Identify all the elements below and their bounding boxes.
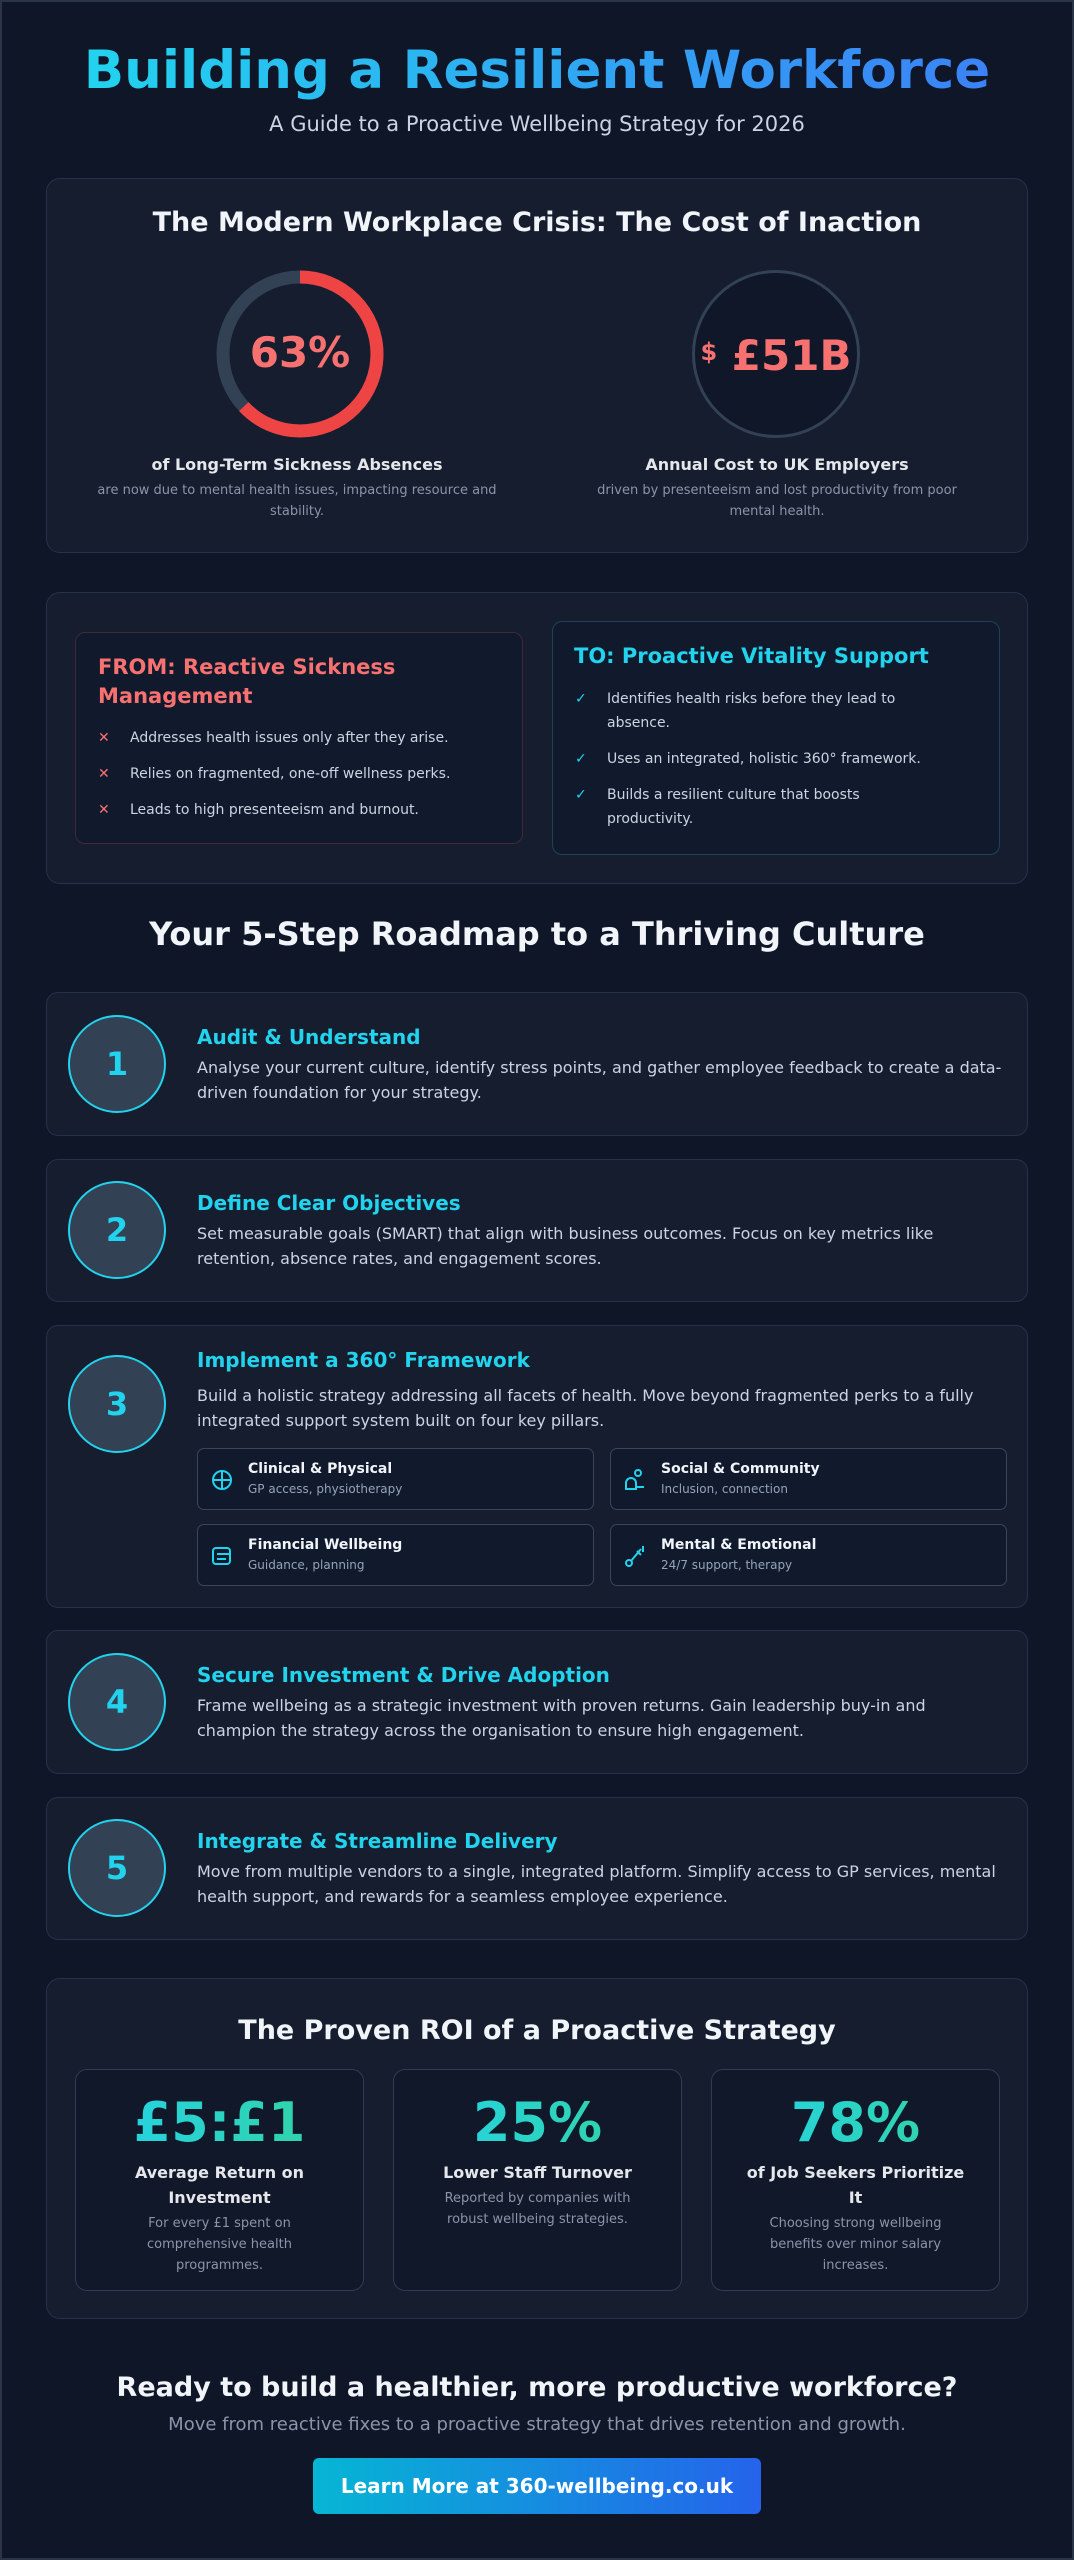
from box: FROM: Reactive Sickness Management — [98, 655, 395, 708]
step 3: 3 — [106, 1385, 128, 1423]
pillar: social — [610, 1448, 1007, 1510]
to box: ✓ — [575, 787, 587, 803]
step 1: Audit & Understand — [197, 1025, 421, 1049]
roadmap heading: Your 5-Step Roadmap to a Thriving Culture — [149, 915, 925, 953]
pillar: financial: Guidance, planning — [248, 1558, 364, 1572]
step 5 — [46, 1797, 1028, 1940]
panel: ROI — [46, 1978, 1028, 2319]
stat label: absences: of Long-Term Sickness Absences — [151, 455, 443, 474]
cost circle: £51B: $ £51B — [700, 331, 852, 380]
CTA button — [313, 2458, 761, 2514]
title: Building a Resilient Workforce — [84, 40, 990, 101]
ROI heading: The Proven ROI of a Proactive Strategy — [238, 2015, 836, 2046]
to box: Builds a resilient culture that boosts productivity. — [607, 787, 860, 827]
CTA subtext: Move from reactive fixes to a proactive strategy that drives retention and growth. — [168, 2414, 906, 2435]
ROI card: 78%: Choosing strong wellbeing benefits over minor salary increases. — [770, 2216, 941, 2273]
CTA button: Learn More at 360-wellbeing.co.uk — [341, 2474, 733, 2498]
step 5: Move from multiple vendors to a single, integrated platform. Simplify access to GP services, mental health support, and rewards for a seamless employee experience. — [197, 1862, 996, 1906]
pillar: social: Inclusion, connection — [661, 1482, 788, 1496]
ROI card: 78%: of Job Seekers Prioritize It — [747, 2163, 964, 2207]
ROI card: 25%: 25% — [473, 2091, 602, 2154]
step 1: 1 — [106, 1045, 128, 1083]
pillar: financial — [197, 1524, 594, 1586]
to box: Identifies health risks before they lead to absence. — [607, 691, 895, 731]
stat label: absences: are now due to mental health issues, impacting resource and stability. — [97, 483, 497, 519]
CTA heading: Ready to build a healthier, more productive workforce? — [117, 2372, 957, 2403]
subtitle: A Guide to a Proactive Wellbeing Strategy for 2026 — [269, 112, 805, 136]
from box — [75, 632, 523, 844]
from box: Relies on fragmented, one-off wellness perks. — [130, 766, 450, 782]
ROI card: 25%: Reported by companies with robust wellbeing strategies. — [445, 2191, 630, 2227]
from box: Leads to high presenteeism and burnout. — [130, 802, 419, 818]
cost circle: £51B — [692, 270, 860, 438]
pillar: mental: Mental & Emotional — [661, 1537, 816, 1553]
step 3: Build a holistic strategy addressing all facets of health. Move beyond fragmented perks to a fully integrated support system built on four key pillars. — [197, 1386, 973, 1430]
step 2: 2 — [106, 1211, 128, 1249]
step 2: Define Clear Objectives — [197, 1191, 461, 1215]
step 4: Frame wellbeing as a strategic investment with proven returns. Gain leadership buy-in and champion the strategy across the organisation to ensure high engagement. — [197, 1696, 926, 1740]
ROI card: 5:1 — [75, 2069, 364, 2291]
ROI card: 78%: 78% — [791, 2091, 920, 2154]
from box: ✕ — [98, 802, 110, 818]
to box: Uses an integrated, holistic 360° framework. — [607, 751, 921, 767]
pillar: clinical — [197, 1448, 594, 1510]
step 4 — [46, 1630, 1028, 1774]
to box — [552, 621, 1000, 855]
pillar: mental: 24/7 support, therapy — [661, 1558, 792, 1572]
donut chart: 63% — [216, 270, 384, 438]
step 4: Secure Investment & Drive Adoption — [197, 1663, 610, 1687]
ROI card: 5:1: For every £1 spent on comprehensive health programmes. — [147, 2216, 292, 2273]
panel: from/to — [46, 592, 1028, 884]
ROI card: 25% — [393, 2069, 682, 2291]
to box: TO: Proactive Vitality Support — [574, 644, 929, 668]
from box: ✕ — [98, 766, 110, 782]
step 1: Analyse your current culture, identify stress points, and gather employee feedback to create a data-driven foundation for your strategy. — [197, 1058, 1001, 1102]
pillar: social: Social & Community — [661, 1461, 820, 1477]
from box: Addresses health issues only after they arise. — [130, 730, 449, 746]
stat label: absences — [97, 455, 497, 519]
crisis heading: The Modern Workplace Crisis: The Cost of Inaction — [153, 207, 921, 238]
ROI card: 5:1: Average Return on Investment — [135, 2163, 304, 2207]
stat label: cost: Annual Cost to UK Employers — [645, 455, 909, 474]
panel: crisis — [46, 178, 1028, 553]
step 2: Set measurable goals (SMART) that align with business outcomes. Focus on key metrics like retention, absence rates, and engagement scores. — [197, 1224, 933, 1268]
from box: ✕ — [98, 730, 110, 746]
ROI card: 78% — [711, 2069, 1000, 2291]
ROI card: 25%: Lower Staff Turnover — [443, 2163, 632, 2182]
pillar: mental — [610, 1524, 1007, 1586]
step 2 — [46, 1159, 1028, 1302]
step 1 — [46, 992, 1028, 1136]
step 3: Implement a 360° Framework — [197, 1348, 530, 1372]
pillar: clinical: Clinical & Physical — [248, 1461, 392, 1477]
to box: ✓ — [575, 751, 587, 767]
step 3 — [46, 1325, 1028, 1608]
step 5: Integrate & Streamline Delivery — [197, 1829, 558, 1853]
step 5: 5 — [106, 1849, 128, 1887]
donut chart: 63%: 63% — [250, 328, 350, 377]
stat label: cost: driven by presenteeism and lost productivity from poor mental health. — [597, 483, 957, 519]
stat label: cost — [597, 455, 957, 519]
step 4: 4 — [106, 1683, 128, 1721]
pillar: clinical: GP access, physiotherapy — [248, 1482, 402, 1496]
ROI card: 5:1: £5:£1 — [134, 2091, 305, 2154]
to box: ✓ — [575, 691, 587, 707]
pillar: financial: Financial Wellbeing — [248, 1537, 402, 1553]
